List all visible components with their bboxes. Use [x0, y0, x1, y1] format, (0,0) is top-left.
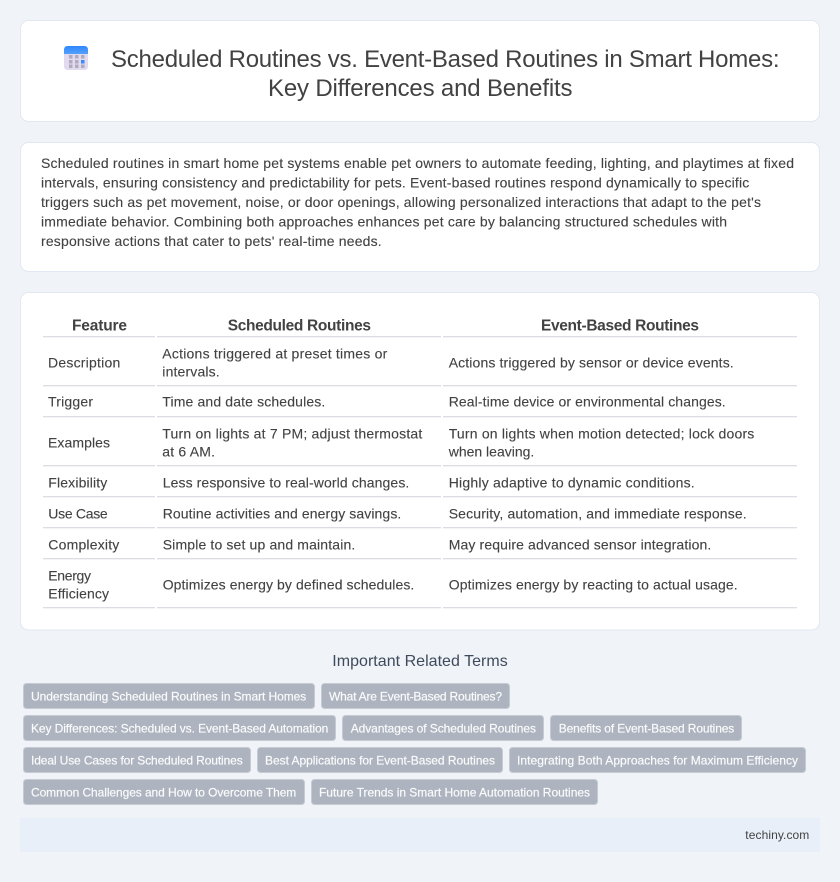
- tag: Best Applications for Event-Based Routines: [265, 753, 495, 767]
- row: energy efficiency: Optimizes energy by reacting to actual usage.: [449, 576, 738, 592]
- tag: [322, 684, 510, 708]
- tag: [24, 780, 304, 804]
- row: flexibility: [43, 474, 797, 497]
- row: examples: Turn on lights when motion detected; lock doors: [449, 425, 754, 441]
- tag: [510, 748, 806, 772]
- tag: Common Challenges and How to Overcome Them: [31, 785, 296, 799]
- tag: Ideal Use Cases for Scheduled Routines: [31, 753, 243, 767]
- paragraph text: triggers such as pet movement, noise, or door openings, allowing personalized interactions that adapt to the pet's: [41, 194, 761, 210]
- tag: [24, 716, 336, 740]
- tag: [258, 748, 502, 772]
- panel: summary paragraph: [20, 142, 820, 272]
- row: description: [43, 345, 797, 386]
- paragraph text: Scheduled routines in smart home pet systems enable pet owners to automate feeding, lighting, and playtimes at fixed: [41, 155, 794, 171]
- row: examples: at 6 AM.: [162, 443, 215, 459]
- row: examples: [43, 425, 797, 466]
- paragraph text: responsive actions that cater to pets' real-time needs.: [41, 233, 382, 249]
- tag: [24, 748, 250, 772]
- footer bar: [20, 818, 820, 852]
- footer source text: techiny.com: [745, 828, 809, 842]
- row: trigger: Real-time device or environmental changes.: [449, 394, 726, 410]
- row: complexity: Complexity: [48, 536, 119, 552]
- panel: comparison table: [20, 292, 820, 630]
- paragraph text: immediate behavior. Combining both approaches enhances pet care by balancing structured schedules with: [41, 214, 727, 230]
- table header row: [43, 318, 797, 337]
- icon: calendar: [64, 46, 88, 70]
- paragraph text: [41, 155, 794, 249]
- tag: What Are Event-Based Routines?: [329, 689, 502, 703]
- row: use case: Routine activities and energy savings.: [163, 505, 401, 521]
- row: use case: [43, 505, 797, 528]
- row: complexity: Simple to set up and maintain.: [163, 536, 355, 552]
- row: examples: Examples: [48, 434, 110, 450]
- tag: Understanding Scheduled Routines in Smart Homes: [31, 689, 306, 703]
- row: trigger: [43, 394, 797, 417]
- title: Key Differences and Benefits: [268, 75, 572, 102]
- row: complexity: [43, 536, 797, 559]
- tag list: [24, 684, 806, 804]
- row: flexibility: Flexibility: [48, 474, 107, 490]
- title: Scheduled Routines vs. Event-Based Routines in Smart Homes:: [111, 46, 780, 73]
- row: use case: Security, automation, and immediate response.: [449, 505, 747, 521]
- tag: [312, 780, 598, 804]
- tag: Key Differences: Scheduled vs. Event-Based Automation: [31, 721, 328, 735]
- row: examples: when leaving.: [448, 443, 534, 459]
- row: complexity: May require advanced sensor integration.: [449, 536, 711, 552]
- row: description: Actions triggered by sensor or device events.: [449, 354, 734, 370]
- row: use case: Use Case: [48, 505, 108, 521]
- heading: important related terms: Important Related Terms: [332, 653, 508, 670]
- tag: Future Trends in Smart Home Automation Routines: [319, 785, 590, 799]
- tag: [550, 716, 742, 740]
- row: energy efficiency: Optimizes energy by defined schedules.: [163, 576, 414, 592]
- row: flexibility: Highly adaptive to dynamic conditions.: [449, 474, 695, 490]
- tag: [24, 684, 314, 708]
- table header row: Scheduled Routines: [228, 318, 371, 335]
- row: examples: Turn on lights at 7 PM; adjust thermostat: [162, 425, 422, 441]
- paragraph text: intervals, ensuring consistency and predictability for pets. Event-based routines respond dynamically to specific: [41, 174, 749, 190]
- row: description: intervals.: [162, 363, 220, 379]
- table header row: Event-Based Routines: [541, 318, 699, 335]
- row: trigger: Trigger: [48, 394, 93, 410]
- table header row: Feature: [72, 318, 127, 335]
- row: energy efficiency: Efficiency: [48, 585, 109, 601]
- row: energy efficiency: [43, 567, 797, 608]
- tag: Integrating Both Approaches for Maximum Efficiency: [517, 753, 798, 767]
- title: [111, 46, 780, 102]
- row: energy efficiency: Energy: [48, 567, 91, 583]
- tag: Benefits of Event-Based Routines: [559, 721, 734, 735]
- panel: title card: [20, 20, 820, 122]
- row: description: Description: [48, 354, 120, 370]
- row: description: Actions triggered at preset times or: [162, 345, 388, 361]
- row: flexibility: Less responsive to real-world changes.: [163, 474, 409, 490]
- row: trigger: Time and date schedules.: [162, 394, 325, 410]
- tag: [342, 716, 544, 740]
- tag: Advantages of Scheduled Routines: [351, 721, 536, 735]
